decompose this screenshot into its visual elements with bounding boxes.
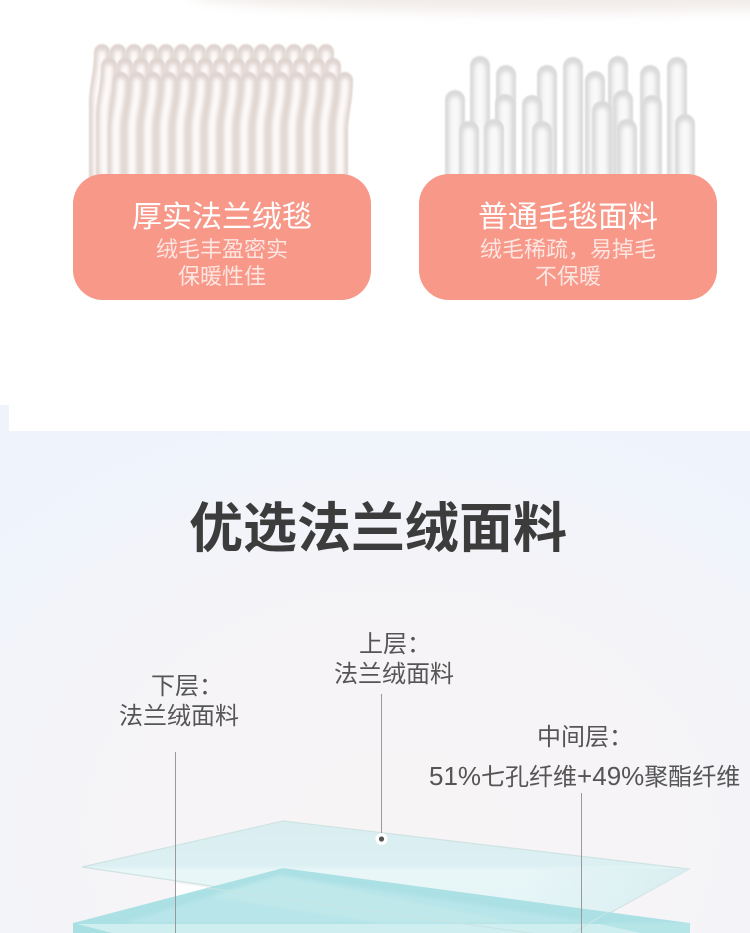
panel: thick fleece label — [73, 174, 371, 300]
ordinary blanket fibres — [455, 66, 685, 252]
white gap under top sheet — [175, 883, 210, 897]
panel: ordinary blanket label: 不保暖 — [535, 264, 601, 288]
label: middle layer: 中间层： — [537, 724, 633, 751]
panel: thick fleece label: 保暖性佳 — [178, 264, 266, 288]
lower section background — [0, 431, 750, 933]
layered fabric diagram — [73, 821, 690, 933]
section left notch — [0, 405, 9, 431]
thick fleece fibres — [97, 52, 345, 207]
label: lower layer — [119, 673, 239, 730]
label: upper layer — [334, 631, 454, 688]
top sheet front edges over lower sheet — [207, 888, 608, 933]
lower sheet — [73, 868, 690, 933]
pointer line: upper layer — [380, 694, 382, 835]
panel: ordinary blanket label: 绒毛稀疏，易掉毛 — [480, 237, 656, 262]
label: middle layer: 51%七孔纤维+49%聚酯纤维 — [429, 761, 740, 791]
label: lower layer: 下层： — [151, 673, 223, 700]
pointer line: lower layer — [174, 752, 176, 933]
top shadow remnant — [190, 0, 750, 12]
top sheet — [82, 821, 689, 933]
label: upper layer: 上层： — [359, 631, 431, 658]
pointer line: middle layer — [580, 793, 582, 933]
panel: thick fleece label: 厚实法兰绒毯 — [132, 201, 312, 234]
panel: ordinary blanket label: 普通毛毯面料 — [478, 201, 658, 234]
label: middle layer — [429, 724, 740, 791]
label: upper layer: 法兰绒面料 — [334, 661, 454, 688]
label: lower layer: 法兰绒面料 — [119, 703, 239, 730]
panel: ordinary blanket label — [419, 174, 717, 300]
panel: thick fleece label: 绒毛丰盈密实 — [156, 237, 288, 262]
heading: 优选法兰绒面料 — [189, 499, 567, 559]
pointer dot — [376, 833, 388, 845]
